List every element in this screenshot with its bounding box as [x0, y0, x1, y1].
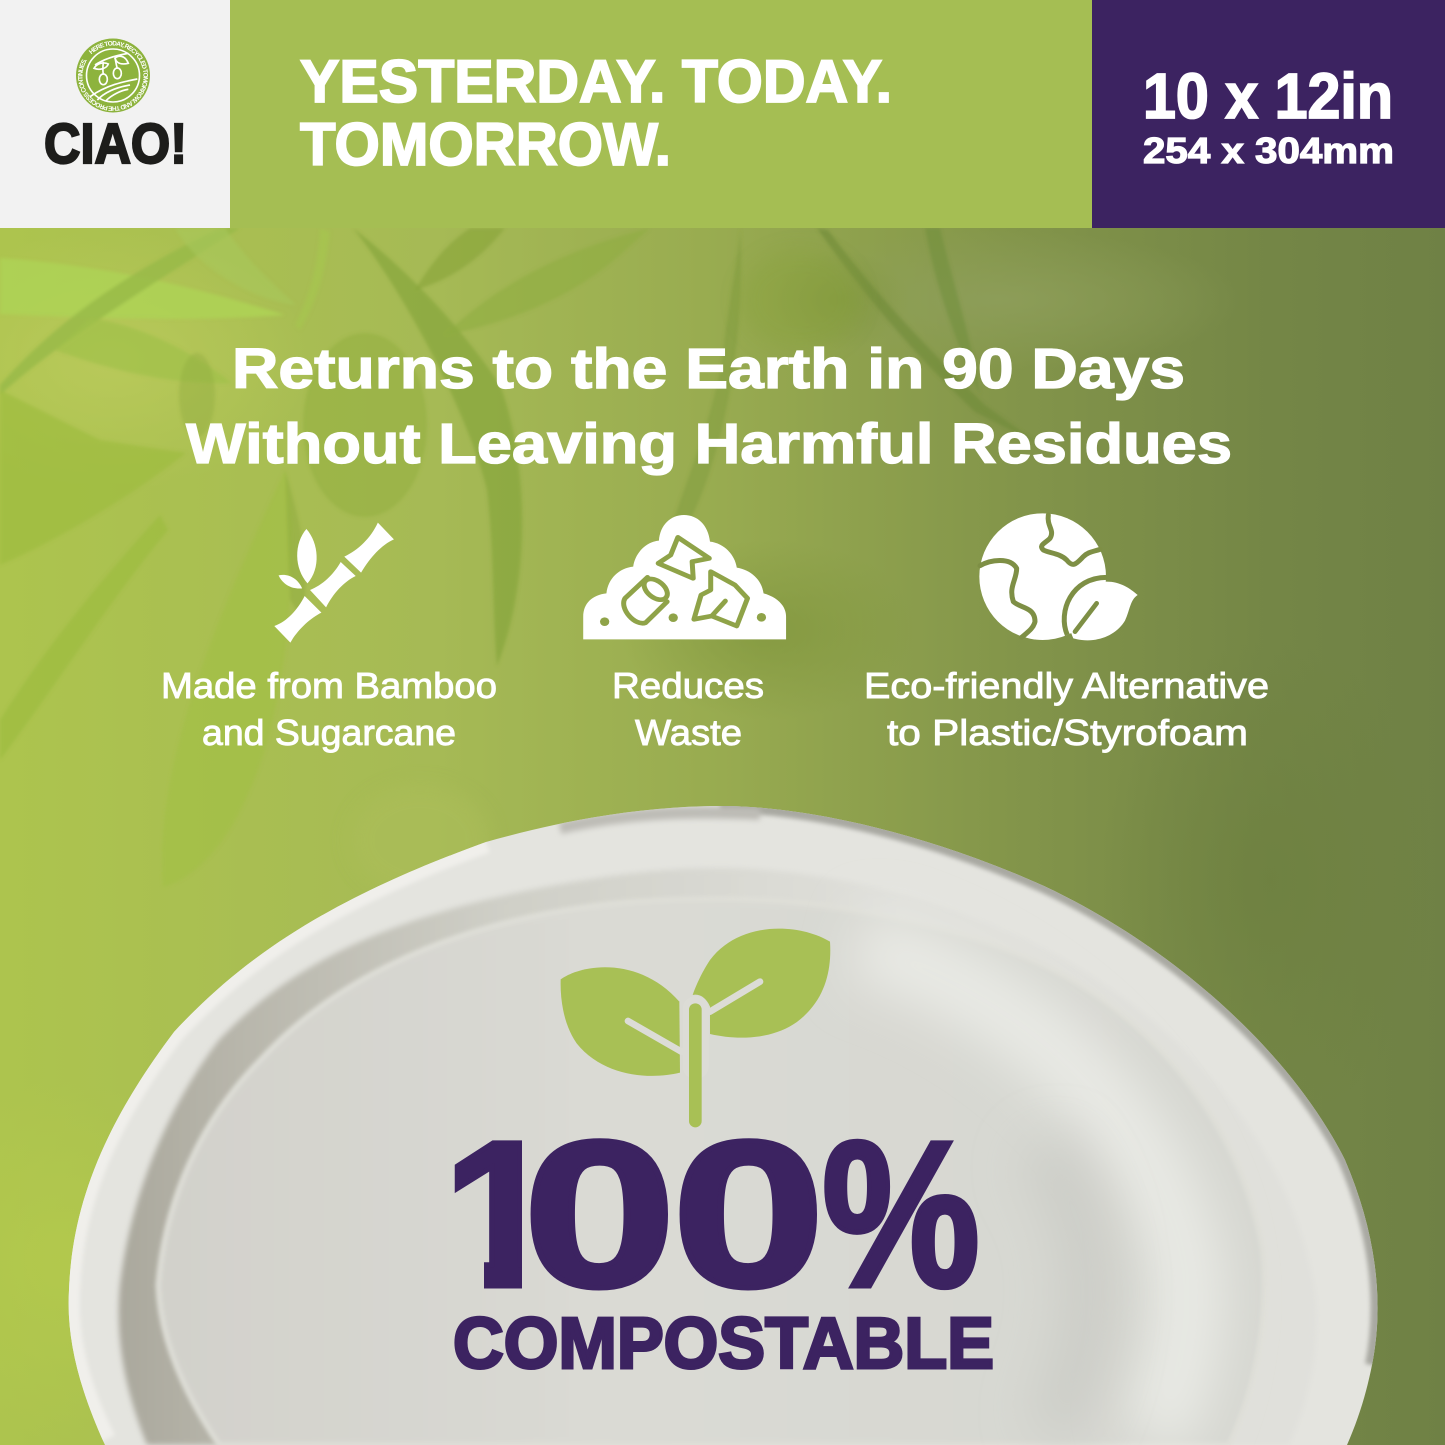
header: tagline panel [230, 0, 1092, 228]
heading: Returns to the Earth in 90 Days [232, 337, 1185, 401]
icon: green sprout [561, 929, 830, 1127]
big figure: 100%: 0 [523, 1099, 676, 1331]
heading: Without Leaving Harmful Residues [186, 412, 1232, 476]
label: reduces waste [612, 665, 764, 753]
big figure: 100% [454, 1138, 978, 1290]
label: eco-friendly alternative [864, 665, 1269, 753]
label: bamboo and sugarcane: Made from Bamboo [161, 665, 497, 706]
big figure: 100%: % [822, 1099, 980, 1331]
heading [186, 337, 1232, 476]
size in millimetres: 254 x 304mm [1143, 130, 1394, 171]
label: reduces waste: Reduces [612, 665, 764, 706]
icon: globe with leaf [979, 513, 1138, 640]
icon: bamboo [274, 523, 394, 643]
label: bamboo and sugarcane: and Sugarcane [202, 712, 456, 753]
header: size panel [1092, 0, 1445, 228]
label: eco-friendly alternative: to Plastic/Styrofoam [887, 712, 1248, 753]
tagline line 2: TOMORROW. [300, 111, 671, 178]
label: reduces waste: Waste [635, 712, 742, 753]
label: compostable: COMPOSTABLE [453, 1304, 994, 1384]
label: eco-friendly alternative: Eco-friendly Alternative [864, 665, 1269, 706]
plate [60, 800, 1390, 1445]
big figure: 100%: 1 [443, 1099, 559, 1331]
brand name: CIAO! [44, 112, 187, 176]
header: logo panel [0, 0, 230, 228]
icon: round olive logo badge: HERE TODAY, RECYCLED TOMORROW. AND THE PROCESS CONTINUES. [78, 40, 148, 111]
icon: waste pile [583, 515, 786, 639]
big figure: 100%: 0 [672, 1099, 825, 1331]
tagline line 1: YESTERDAY. TODAY. [300, 48, 892, 115]
size in inches: 10 x 12in [1143, 60, 1393, 132]
label: bamboo and sugarcane [161, 665, 497, 753]
